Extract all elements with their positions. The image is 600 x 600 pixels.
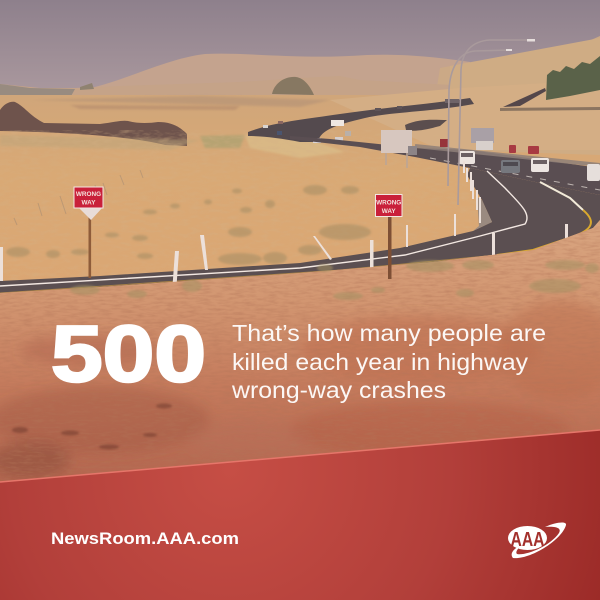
website link: NewsRoom.AAA.com xyxy=(51,529,239,548)
AAA logo: AAA xyxy=(510,529,544,551)
AAA logo xyxy=(508,523,566,558)
sky xyxy=(0,0,600,100)
distant road with traffic xyxy=(248,98,474,143)
light poles xyxy=(448,39,535,205)
midground field xyxy=(0,95,600,295)
wrong way sign right: WRONG xyxy=(376,200,401,206)
distant hills xyxy=(0,36,600,130)
statement text: killed each year in highway xyxy=(232,349,528,375)
foreground shrubs xyxy=(12,260,599,450)
sign back panel xyxy=(381,130,412,168)
fence line xyxy=(14,170,143,225)
foreground grass texture xyxy=(0,220,600,495)
foreground ground xyxy=(0,220,600,490)
foreground highway curve xyxy=(0,168,600,293)
scrub bushes midground xyxy=(6,185,371,265)
wrong way sign left xyxy=(74,187,104,278)
field shading xyxy=(0,135,345,158)
wrong way sign right: WAY xyxy=(382,208,396,215)
dark gravel piles xyxy=(0,102,187,146)
traffic on highway xyxy=(408,128,600,181)
statement text: wrong-way crashes xyxy=(231,377,446,403)
statistic: 500: 500 xyxy=(51,309,206,398)
roadside marker posts xyxy=(0,161,568,293)
upper highway xyxy=(290,136,600,195)
statement text xyxy=(231,320,546,403)
far terraces xyxy=(30,38,600,155)
wrong way sign left: WAY xyxy=(82,200,96,206)
midground grass texture xyxy=(0,130,480,295)
guard rail xyxy=(415,146,600,165)
statement text: That’s how many people are xyxy=(232,320,546,346)
footer band xyxy=(0,430,600,600)
foreground shading xyxy=(0,300,600,478)
wrong way sign left: WRONG xyxy=(76,191,101,198)
wrong way sign right xyxy=(376,194,402,279)
